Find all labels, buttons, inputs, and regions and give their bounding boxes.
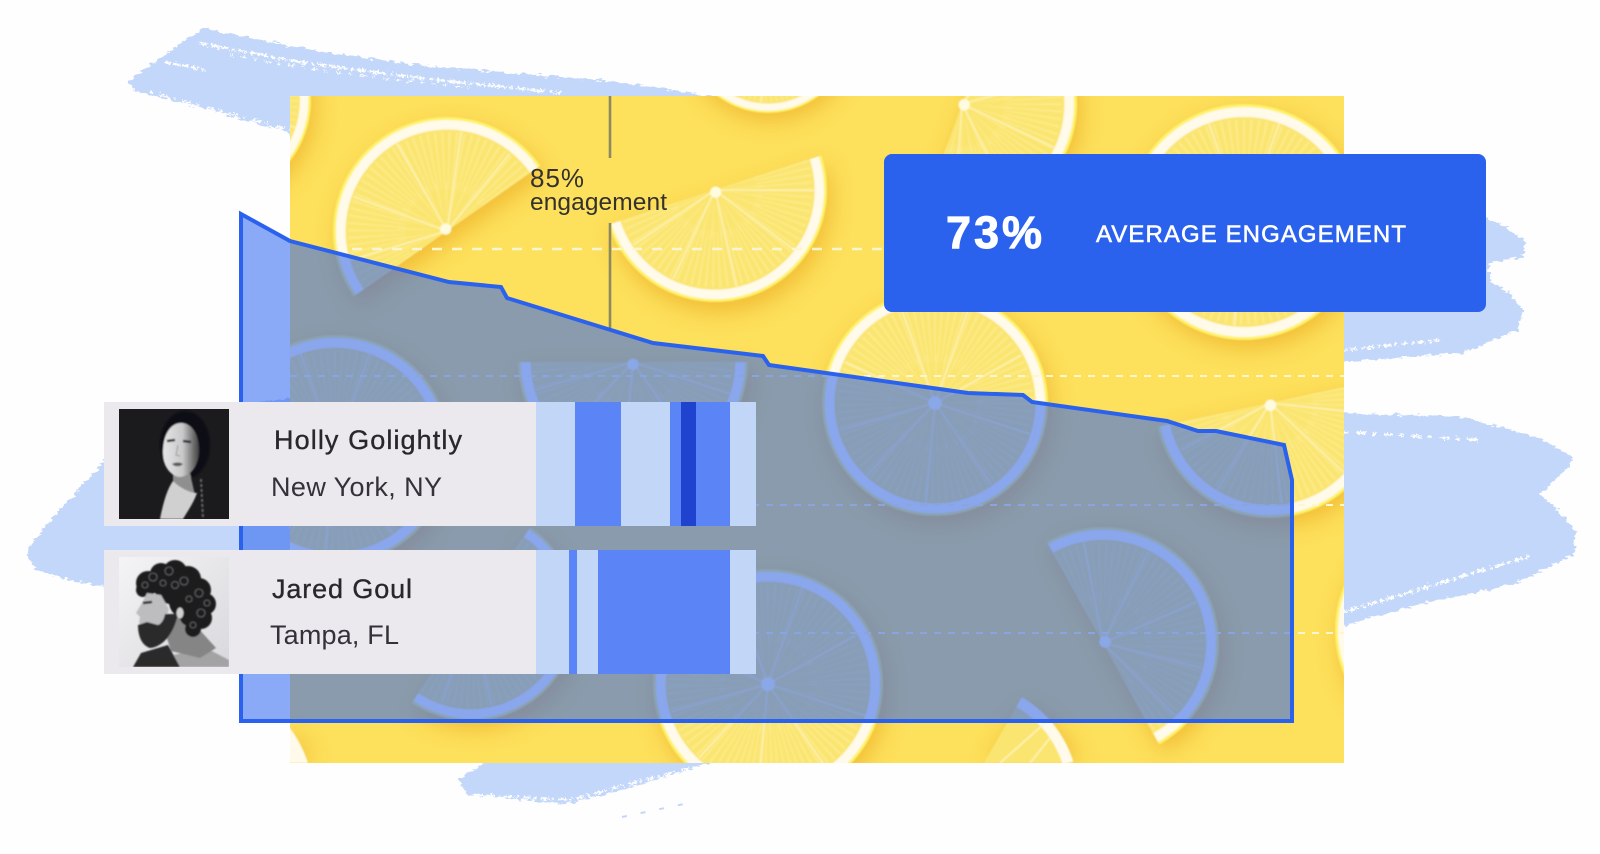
85% engagement label: engagement (530, 189, 667, 216)
engagement area chart (241, 214, 1292, 721)
viewer row: Holly Golightly (104, 402, 756, 526)
watch segments: Holly (536, 402, 756, 526)
name: Jared Goul: Jared Goul (272, 574, 412, 604)
brush stroke: top (128, 28, 714, 135)
brush stroke: right lower (1300, 412, 1575, 625)
lemon photo background (290, 96, 1344, 763)
name: Holly Golightly: Holly Golightly (274, 425, 462, 455)
brush stroke: right upper (1300, 218, 1526, 362)
brush stroke: bottom (459, 760, 719, 804)
stat card: average engagement (884, 154, 1486, 312)
location: Tampa, FL: Tampa, FL (270, 620, 399, 650)
stat value: 73% (946, 207, 1042, 258)
brush dry streaks (150, 43, 1530, 800)
brush specks (622, 804, 684, 817)
location: New York, NY: New York, NY (271, 472, 442, 502)
stat label: AVERAGE ENGAGEMENT (1096, 221, 1406, 248)
portrait: Holly (119, 409, 229, 519)
portrait: Jared (119, 557, 229, 667)
viewer row: Jared Goul (104, 550, 756, 674)
brush stroke: left (27, 398, 291, 587)
85% engagement label (530, 163, 667, 216)
peak marker line (609, 96, 611, 328)
watch segments: Jared (536, 550, 756, 674)
85% engagement label: 85% (530, 163, 584, 193)
